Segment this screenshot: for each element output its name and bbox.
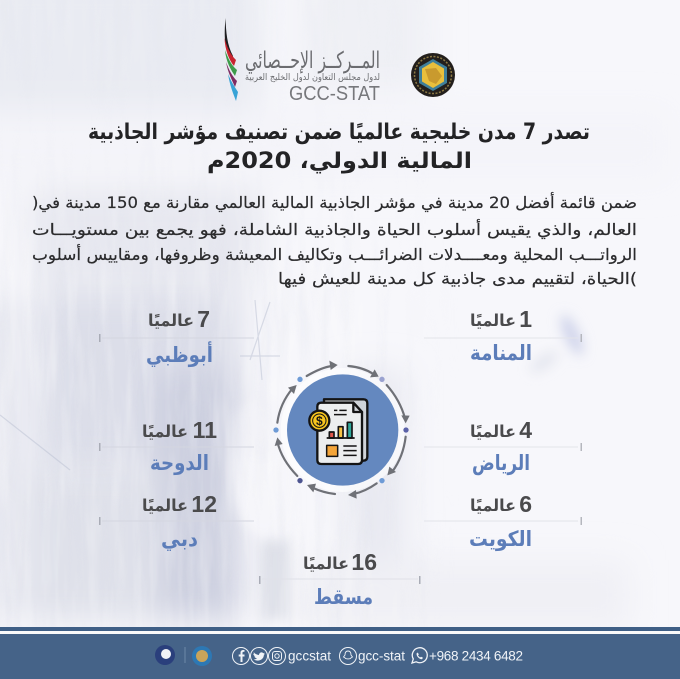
ranking: Dubai: دبي <box>161 527 198 551</box>
icon: ribbon swoosh <box>224 18 238 101</box>
intro paragraph <box>32 192 637 289</box>
title: المالية الدولي، 2020م <box>207 149 472 174</box>
intro paragraph: )الحياة، لتقييم مدى جاذبية كل مدينة للعيش فيها <box>278 269 637 289</box>
ranking: Riyadh: الرياض <box>472 451 530 475</box>
footer band <box>0 627 680 679</box>
ranking: Doha: عالميًا <box>142 422 188 441</box>
footer: phone: +968 2434 6482 <box>429 648 523 664</box>
ranking: Dubai <box>99 491 254 551</box>
ranking: Doha: 11 <box>193 417 217 443</box>
ranking: Riyadh <box>424 417 582 475</box>
logo arabic name: المــركــز الإحــصائي <box>245 48 380 74</box>
icon: financial report <box>309 399 367 464</box>
intro paragraph: العالم، والذي يقيس أسلوب الحياة والجاذبية الشاملة، فهو يجمع بين مستويـــات <box>32 219 637 240</box>
ranking: Manama: عالميًا <box>470 311 516 330</box>
ranking: Manama: المنامة <box>470 341 532 365</box>
ranking: Dubai: 12 <box>191 491 217 517</box>
ranking: Kuwait: الكويت <box>469 527 532 551</box>
ranking: Abu Dhabi: 7 <box>197 306 210 332</box>
ranking: Riyadh: 4 <box>519 417 532 443</box>
dollar sign: $ <box>316 414 323 428</box>
logo: GCC-STAT <box>224 18 380 105</box>
cycle arrows <box>277 366 406 494</box>
ranking: Abu Dhabi <box>99 306 254 367</box>
ranking: Kuwait: عالميًا <box>470 496 516 515</box>
ranking: Muscat <box>259 549 420 609</box>
footer: handle gcc-stat: gcc-stat <box>358 648 405 664</box>
ranking: Abu Dhabi: عالميًا <box>148 311 194 330</box>
ranking: Manama: 1 <box>519 306 532 332</box>
ranking: Kuwait: 6 <box>519 491 532 517</box>
halo ring <box>281 368 405 492</box>
icon: GCC emblem <box>411 53 455 97</box>
logo latin name: GCC-STAT <box>289 83 380 105</box>
central graphic: report icon in cycle <box>273 361 410 499</box>
footer: social icons <box>232 648 427 664</box>
ranking: Muscat: عالميًا <box>303 554 349 573</box>
title <box>88 120 590 174</box>
ranking: Doha: الدوحة <box>150 451 209 475</box>
footer: certification badges <box>155 645 212 666</box>
footer: handle gccstat: gccstat <box>288 648 331 664</box>
ranking: Riyadh: عالميًا <box>470 422 516 441</box>
logo arabic subtitle: لدول مجلس التعاون لدول الخليج العربية <box>245 73 380 83</box>
ranking: Muscat: 16 <box>351 549 377 575</box>
ranking: Manama <box>424 306 582 365</box>
intro paragraph: الرواتـــب المحلية ومعــــدلات الضرائـــب وتكاليف المعيشة وظروفها، ومقاييس أسلوب <box>32 244 637 265</box>
ranking: Dubai: عالميًا <box>142 496 188 515</box>
ranking: Muscat: مسقط <box>314 585 373 609</box>
title: تصدر 7 مدن خليجية عالميًا ضمن تصنيف مؤشر الجاذبية <box>88 120 590 145</box>
cycle dots <box>273 377 409 483</box>
intro paragraph: ضمن قائمة أفضل 20 مدينة في مؤشر الجاذبية المالية العالمي مقارنة مع 150 مدينة في( <box>32 192 637 213</box>
center disc <box>287 374 398 486</box>
ranking: Doha <box>99 417 254 475</box>
ranking: Abu Dhabi: أبوظبي <box>146 340 213 367</box>
ranking: Kuwait <box>424 491 582 551</box>
